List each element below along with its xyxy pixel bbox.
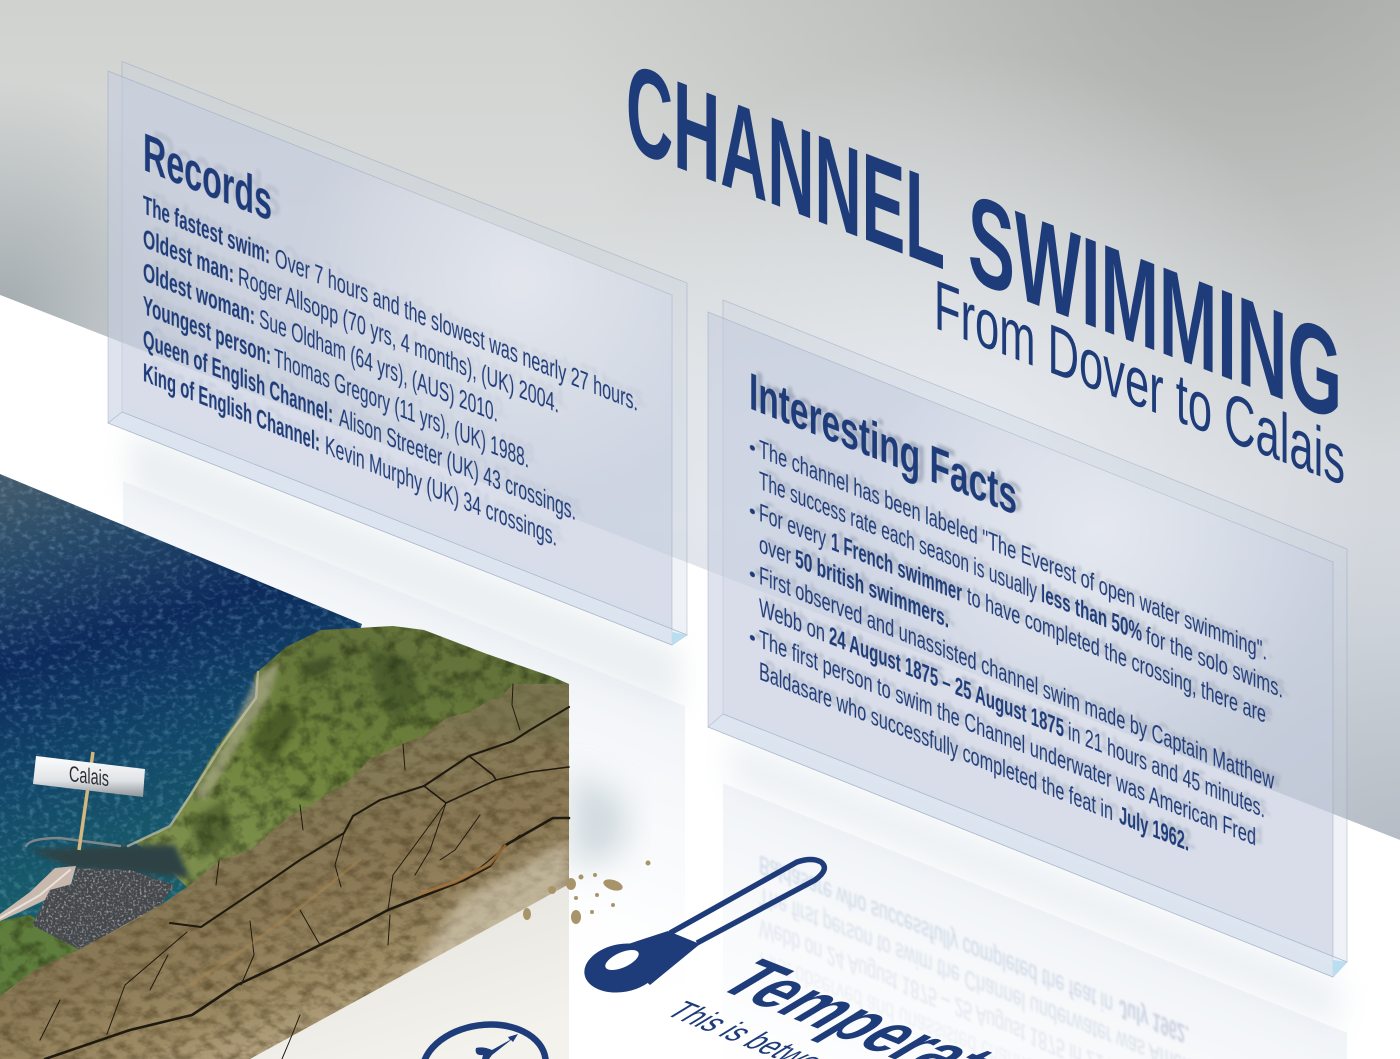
white floor (0, 295, 1400, 1059)
rock tone and fade toward the floor (406, 689, 569, 974)
hill with grass (134, 626, 569, 890)
record: queen of the channel: Alison Streeter (UK) 43 crossings. (339, 402, 576, 526)
rock cracks (40, 684, 569, 1059)
panel: records text (143, 121, 638, 584)
record: queen of the channel (143, 324, 576, 526)
record: king of the channel: Kevin Murphy (UK) 34 crossings. (325, 430, 557, 552)
marble reflection under the block (245, 880, 569, 1059)
fact: French and British swimmers (749, 493, 1266, 761)
sign: Calais: Calais (69, 761, 109, 791)
town (32, 868, 175, 950)
record: youngest person: Youngest person: (143, 290, 271, 370)
fact: Fred Baldasare underwater swim: July 1962. (1119, 800, 1189, 857)
facts heading: Interesting Facts (749, 362, 1017, 527)
record: fastest swim: Over 7 hours and the slowest was nearly 27 hours. (275, 243, 638, 417)
record: king of the channel (143, 357, 557, 552)
fact: Captain Matthew Webb: in 21 hours and 45 minutes. (1068, 716, 1265, 824)
record: oldest man: Roger Allsopp (70 yrs, 4 months), (UK) 2004. (238, 261, 559, 419)
record: fastest swim (143, 190, 638, 417)
fact: Everest of open water swimming: for the solo swims. (1146, 620, 1283, 704)
fact: Everest of open water swimming (749, 430, 1283, 704)
fact: French and British swimmers: For every (759, 497, 826, 553)
lower-left land (0, 915, 130, 1010)
beach (0, 866, 76, 921)
record: youngest person (143, 290, 529, 474)
sea surface (0, 474, 362, 950)
record: youngest person: Thomas Gregory (11 yrs), (UK) 1988. (274, 343, 529, 474)
icon: thermometer (580, 860, 824, 998)
hill shading and pale cliff (190, 650, 420, 860)
terrain block: Calais coast (0, 474, 650, 1059)
rock cut face (0, 684, 569, 1059)
record: oldest woman: Sue Oldham (64 yrs), (AUS) 2010. (259, 303, 498, 428)
fact: French and British swimmers: • (749, 500, 756, 524)
fact: Captain Matthew Webb: 24 August 1875 – 25 August 1875 (829, 620, 1064, 743)
title: Channel Swimming: CHANNEL (626, 36, 945, 297)
record: fastest swim: The fastest swim: (143, 190, 270, 270)
floor reflections and soft shadows of glass panels (123, 430, 1347, 1059)
sign: Calais (33, 752, 145, 850)
fact: Everest of open water swimming: The success rate each season is usually (759, 466, 1037, 606)
fact: Fred Baldasare underwater swim: • (749, 627, 756, 651)
crumbs of rock (523, 860, 650, 924)
background wall (0, 0, 1400, 840)
record: queen of the channel: Queen of English Channel: (143, 324, 333, 429)
fact: French and British swimmers: 50 british swimmers. (795, 543, 949, 634)
record: oldest man: Oldest man: (143, 223, 234, 289)
fact: Everest of open water swimming: • (749, 437, 756, 461)
panel: interesting facts text (749, 362, 1283, 894)
panel: records glass slab (108, 62, 687, 645)
records heading: Records (143, 121, 272, 233)
icon: clock (417, 1017, 551, 1059)
breakwater and shoreline (0, 672, 258, 918)
harbour water (30, 845, 190, 878)
fact: Captain Matthew Webb: Webb on (759, 592, 825, 648)
panel: interesting facts glass slab (708, 300, 1347, 977)
record: oldest man (143, 223, 559, 419)
fact: Everest of open water swimming: less than 50% (1041, 578, 1142, 648)
fact: Captain Matthew Webb: • (749, 563, 756, 587)
record: king of the channel: King of English Channel: (143, 357, 320, 457)
fact: French and British swimmers: 1 French swimmer (831, 526, 962, 607)
record: oldest woman: Oldest woman: (143, 257, 255, 331)
fact: Fred Baldasare underwater swim: Baldasare who successfully completed the feat in (759, 656, 1113, 826)
fact: French and British swimmers: over (759, 529, 791, 571)
record: oldest woman (143, 257, 498, 428)
fact: Captain Matthew Webb (749, 557, 1274, 827)
